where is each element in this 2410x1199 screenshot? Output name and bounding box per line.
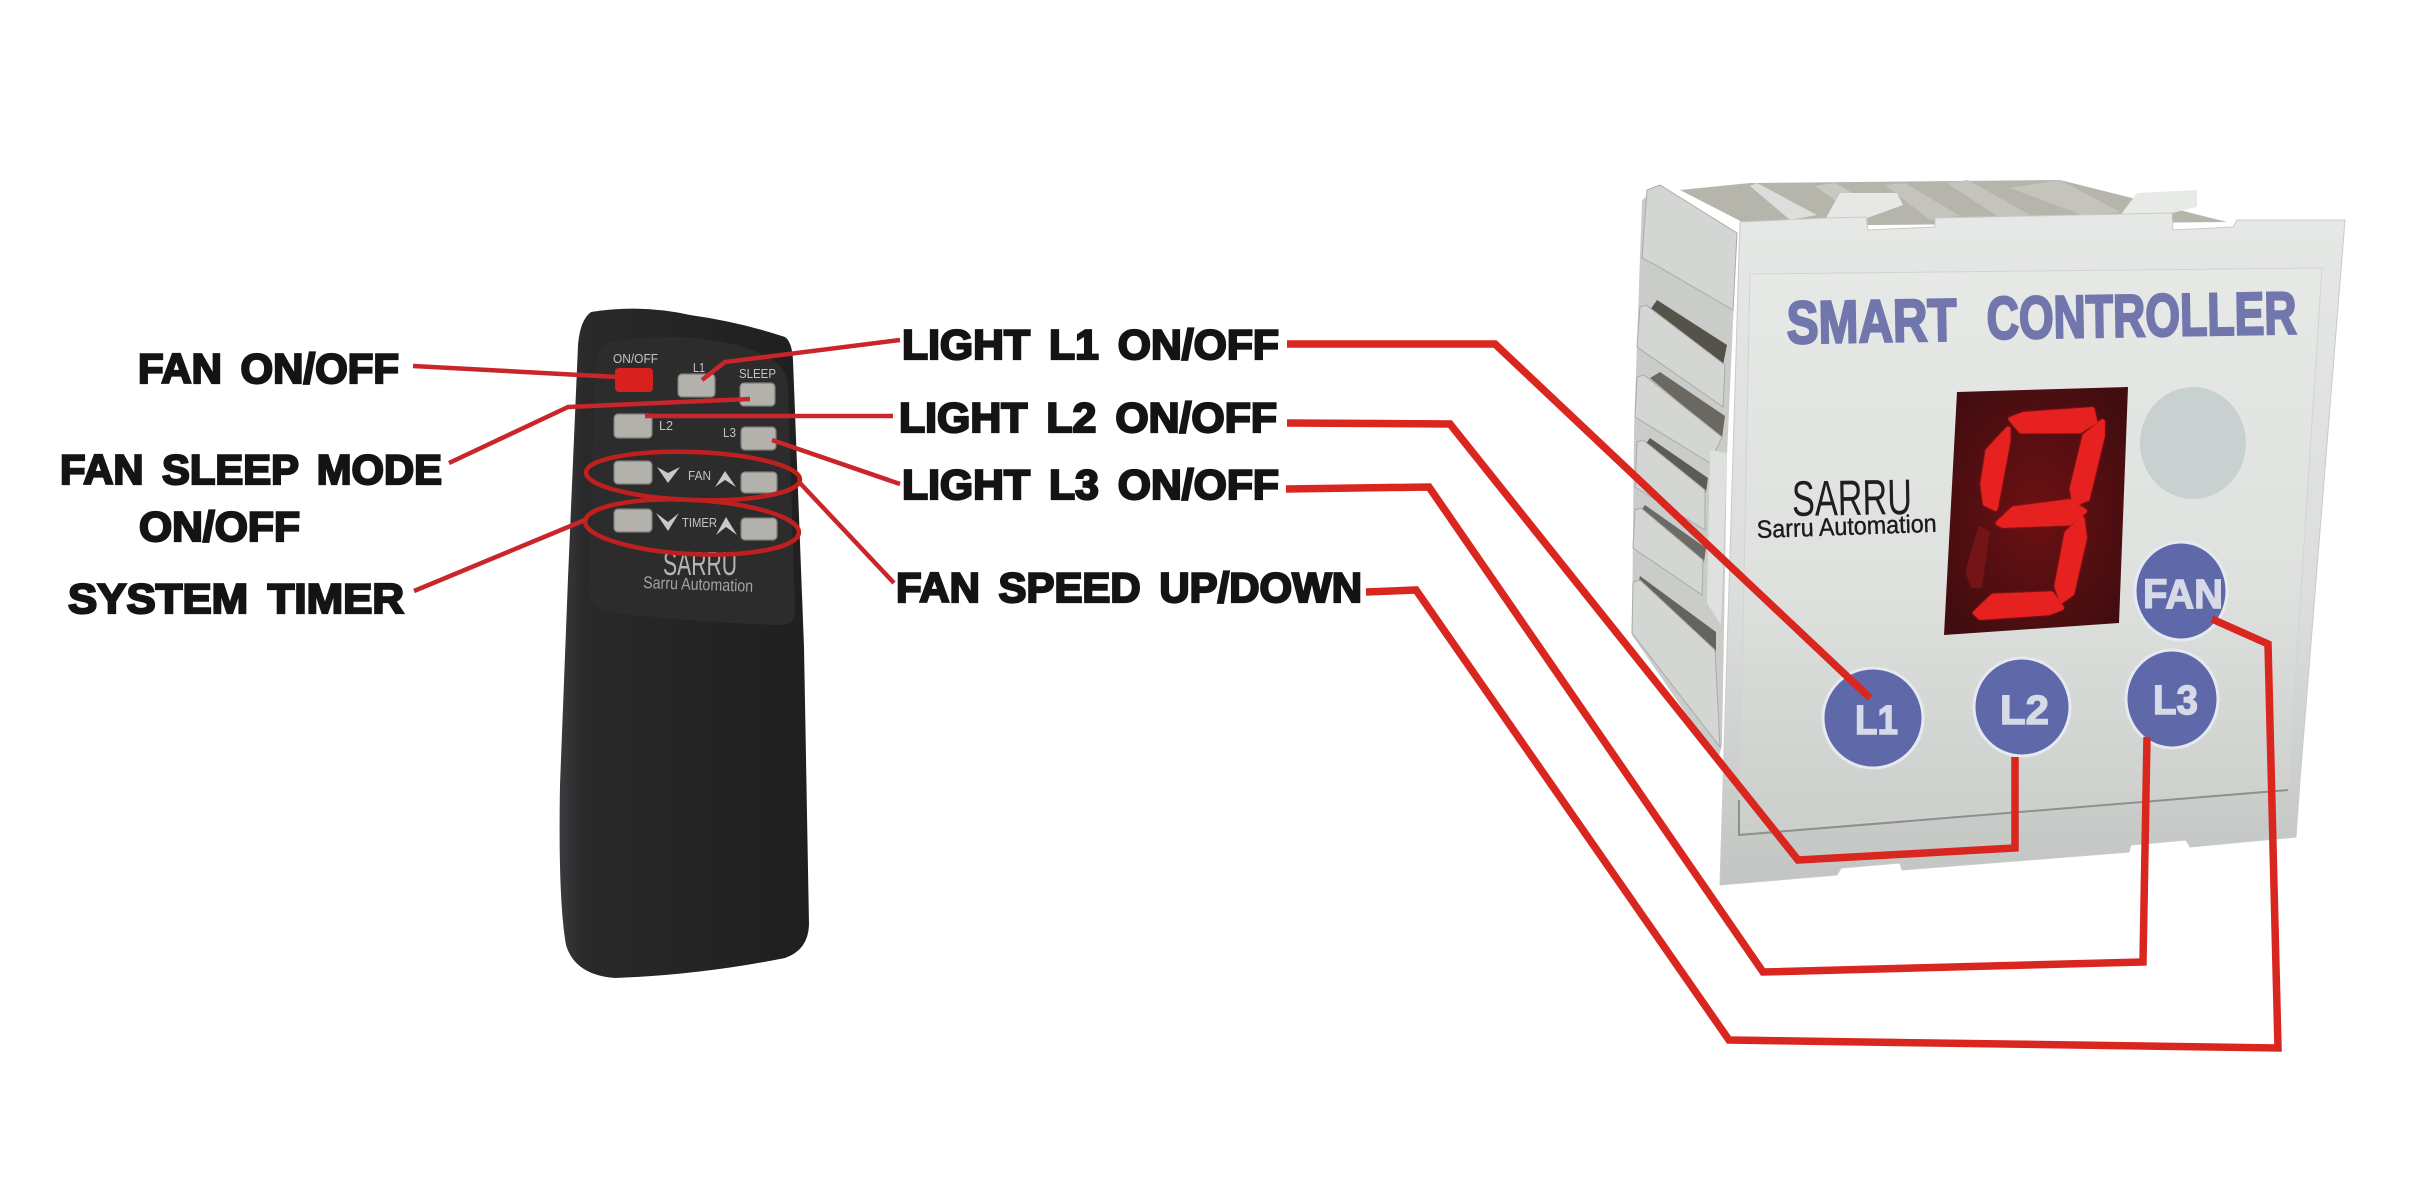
remote brand logo: Sarru Automation xyxy=(643,573,753,596)
arrow: fan speed label to remote xyxy=(799,482,894,583)
key: FAN xyxy=(2135,542,2227,640)
device top vents xyxy=(1680,180,2227,230)
label: light L2 on/off: LIGHT L2 ON/OFF xyxy=(899,394,1277,441)
remote button captions xyxy=(613,351,776,530)
seven segment display xyxy=(1944,387,2128,635)
button: timer up xyxy=(741,518,777,540)
IR sensor window xyxy=(2140,387,2246,499)
device sticker panel xyxy=(1739,268,2322,832)
label: light L1 on/off: LIGHT L1 ON/OFF xyxy=(902,321,1279,368)
key: FAN: FAN xyxy=(2143,571,2223,617)
ring: fan buttons xyxy=(585,448,801,504)
key: L2 xyxy=(1974,658,2070,756)
button: timer down xyxy=(614,509,652,532)
key: L2: L2 xyxy=(2000,687,2049,733)
button: sleep xyxy=(740,383,775,406)
device side fins xyxy=(1632,185,1737,760)
arrow: L3 label to device key xyxy=(1286,487,2147,972)
label: fan speed up/down: FAN SPEED UP/DOWN xyxy=(896,564,1362,611)
arrow: L1 label to device key xyxy=(1287,344,1870,698)
heading: smart controller: SMART xyxy=(1786,286,1957,356)
remote brand logo xyxy=(643,545,753,596)
remote button captions: L1 xyxy=(693,360,705,375)
arrow: L3 label to remote xyxy=(772,440,900,484)
remote keypad panel xyxy=(589,337,795,625)
button: L3 xyxy=(741,427,776,450)
label: system timer: SYSTEM TIMER xyxy=(68,575,404,622)
bottom sticker edge xyxy=(1739,790,2288,835)
remote button captions: L3 xyxy=(723,425,736,440)
arrow: system timer label to remote xyxy=(414,520,585,591)
arrow: L2 label to device key xyxy=(1287,423,2015,860)
remote chevrons xyxy=(656,467,737,535)
device brand logo: SARRU xyxy=(1791,469,1912,527)
arrow: fan label to device key xyxy=(1366,590,2278,1048)
remote button captions: TIMER xyxy=(682,515,717,530)
remote body xyxy=(560,309,809,978)
label: fan sleep mode on/off: ON/OFF xyxy=(139,503,300,550)
ring: timer buttons xyxy=(584,494,800,560)
label: fan on/off: FAN ON/OFF xyxy=(138,345,399,392)
device brand logo: Sarru Automation xyxy=(1756,510,1937,544)
key: L3: L3 xyxy=(2153,677,2198,723)
key: L1 xyxy=(1823,668,1923,768)
remote button captions: ON/OFF xyxy=(613,351,658,366)
heading: smart controller xyxy=(1786,280,2297,356)
button: fan up xyxy=(741,472,777,493)
device brand logo xyxy=(1756,469,1937,544)
remote control xyxy=(560,309,809,978)
button: fan down xyxy=(614,461,652,484)
label: fan sleep mode on/off: FAN SLEEP MODE xyxy=(60,446,442,493)
key: L3 xyxy=(2126,650,2218,748)
smart controller device xyxy=(1632,180,2345,885)
button: L2 xyxy=(614,414,652,438)
arrow: L2 label to remote xyxy=(645,414,893,418)
remote buttons xyxy=(614,368,777,540)
remote button captions: L2 xyxy=(659,418,673,433)
remote button captions: SLEEP xyxy=(739,366,776,381)
device front face xyxy=(1720,213,2345,885)
heading: smart controller: CONTROLLER xyxy=(1986,280,2297,352)
arrow: L1 label to remote xyxy=(702,340,900,380)
button: on/off xyxy=(615,368,653,392)
label: light L3 on/off: LIGHT L3 ON/OFF xyxy=(902,461,1279,508)
label: fan sleep mode on/off xyxy=(60,446,442,550)
arrow: fan on/off to remote xyxy=(413,366,617,377)
remote brand logo: SARRU xyxy=(663,545,737,582)
button: L1 xyxy=(678,374,715,397)
key: L1: L1 xyxy=(1855,697,1898,743)
arrow: sleep label to remote xyxy=(449,399,750,463)
remote button captions: FAN xyxy=(688,468,711,483)
